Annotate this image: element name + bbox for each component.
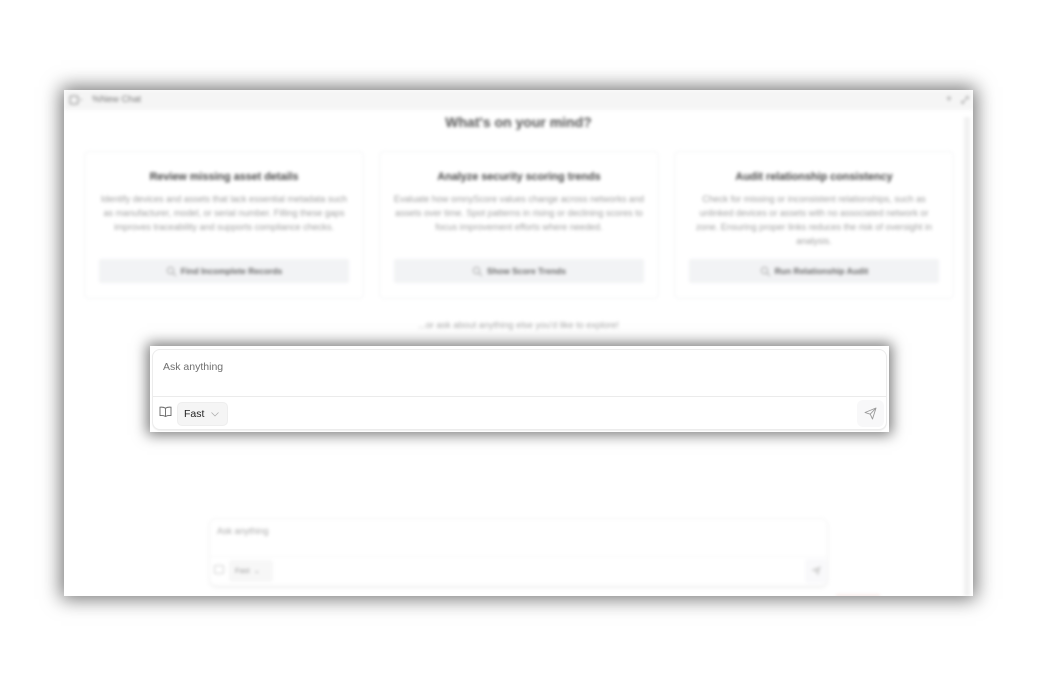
panel: analyze security scoring trends: Analyze security scoring trends [437,171,601,183]
icon: sidebar toggle [68,94,82,106]
panel: audit relationship consistency: unlinked devices or assets with no associated network or [700,208,928,218]
scrollbar [964,117,970,596]
model selector [229,560,273,582]
panel: audit relationship consistency: analysis. [796,236,832,246]
composer divider [153,396,886,397]
title bar [64,90,973,110]
icon: chevron [211,412,219,416]
icon: send [812,566,822,575]
panel: analyze security scoring trends: Show Score Trends [487,266,566,276]
window title: %New Chat [92,94,141,104]
panel: review missing asset details: Find Incomplete Records [181,266,282,276]
icon: expand [960,95,970,105]
panel: audit relationship consistency: Audit relationship consistency [735,171,893,183]
panel: audit relationship consistency: zone. Ensuring proper links reduces the risk of oversight in [696,222,932,232]
icon: book [160,406,172,417]
highlighted composer [150,346,889,432]
panel: analyze security scoring trends [379,151,659,299]
panel: review missing asset details: improves traceability and supports compliance checks. [114,222,334,232]
send button [805,559,827,583]
panel: review missing asset details: as manufacturer, model, or serial number. Filling these gaps [103,208,345,218]
composer placeholder: Ask anything [163,361,223,373]
icon: send [864,408,876,420]
composer frame [152,349,887,430]
send button [857,400,884,427]
heading: What's on your mind? [445,114,592,130]
panel: review missing asset details: Review missing asset details [150,171,298,183]
panel: audit relationship consistency [674,151,954,299]
panel: review missing asset details: Identify devices and assets that lack essential metadata such [101,194,347,204]
icon: book [214,565,224,574]
icon: add: + [946,94,952,105]
model selector: Fast ⌄ [235,566,260,575]
background composer [209,518,828,586]
model selector: Fast [184,408,204,420]
panel: analyze security scoring trends: assets over time. Spot patterns in rising or declining scores to [395,208,643,218]
panel: audit relationship consistency: Check for missing or inconsistent relationships, such as [702,194,926,204]
model selector [177,402,228,426]
bottom edge accent [836,595,880,596]
app window (blurred) [64,90,973,596]
composer divider [210,556,827,557]
panel: analyze security scoring trends: Evaluate how omnyScore values change across networks and [394,194,644,204]
prompt hint: ...or ask about anything else you'd like to explore! [418,320,619,330]
panel: review missing asset details [84,151,364,299]
composer placeholder: Ask anything [217,526,269,536]
panel: analyze security scoring trends: focus improvement efforts where needed. [435,222,603,232]
panel: audit relationship consistency: Run Relationship Audit [775,266,868,276]
